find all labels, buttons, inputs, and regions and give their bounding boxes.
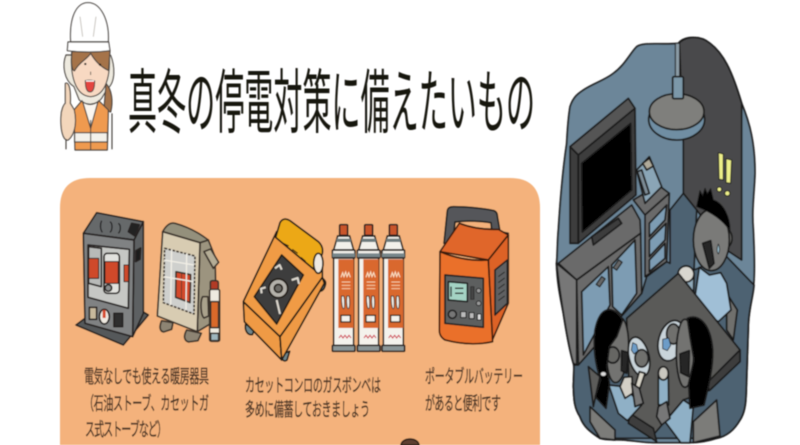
icon: partial head at panel bottom <box>401 439 419 445</box>
title: 真冬の停電対策に備えたいもの <box>128 66 535 143</box>
exclamation marks <box>717 153 732 196</box>
caption: portable battery <box>425 366 523 415</box>
panel: orange items panel <box>60 178 540 445</box>
icon: kerosene stove <box>76 213 148 345</box>
caption: heaters: 電気なしでも使える暖房器具 <box>84 367 209 388</box>
caption: heaters: （石油ストーブ、カセットガ <box>84 393 209 415</box>
lamp <box>649 43 705 140</box>
room background <box>557 37 755 443</box>
jar <box>676 264 696 292</box>
table <box>627 273 740 442</box>
woman on right <box>657 317 720 443</box>
cabinet <box>557 205 642 365</box>
caption: heaters: ス式ストーブなど） <box>85 419 167 441</box>
woman on left <box>588 310 645 440</box>
bottle <box>658 367 669 405</box>
icon: gas cylinders <box>332 225 405 351</box>
caption: cassette stove gas: 多めに備蓄しておきましょう <box>245 399 370 421</box>
caption: cassette stove gas <box>245 376 381 421</box>
illustration: family in a dark room during blackout <box>557 37 755 443</box>
icon: portable battery <box>439 207 508 344</box>
television <box>570 98 636 243</box>
caption: heaters <box>84 367 209 441</box>
plates <box>628 319 681 376</box>
caption: cassette stove gas: カセットコンロのガスボンベは <box>245 376 381 397</box>
drawers with phone <box>633 157 669 277</box>
man at table <box>693 188 737 342</box>
caption: portable battery: があると便利です <box>425 394 501 415</box>
floor <box>573 193 754 438</box>
icon: gas cartridge heater <box>157 223 220 342</box>
icon: cassette stove <box>243 219 326 361</box>
caption: portable battery: ポータブルバッテリー <box>425 366 523 388</box>
icon: worker in helmet giving thumbs up <box>61 3 114 150</box>
dark wall column <box>679 37 742 260</box>
